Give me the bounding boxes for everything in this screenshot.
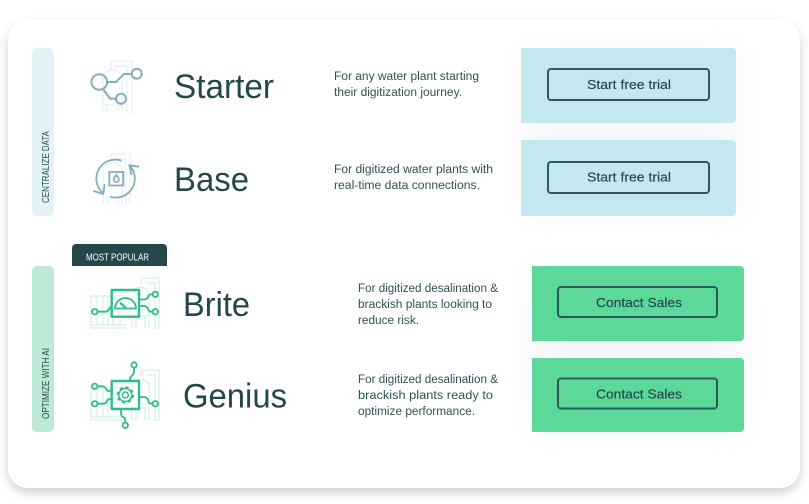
most popular badge xyxy=(72,244,167,266)
heading: Brite: Brite xyxy=(183,286,250,324)
text: genius description: brackish plants ready to xyxy=(358,390,493,402)
panel: starter call to action xyxy=(521,48,736,123)
most popular badge: MOST POPULAR xyxy=(86,252,149,264)
button: start free trial xyxy=(548,69,709,100)
icon: starter network xyxy=(92,61,142,112)
text: brite description: reduce risk. xyxy=(358,315,419,327)
button: contact sales xyxy=(558,287,717,317)
panel: brite call to action xyxy=(532,266,744,341)
panel: base call to action xyxy=(521,140,736,216)
panel: optimize with AI tab xyxy=(32,266,54,432)
button: start free trial xyxy=(548,162,709,193)
text: base description: For digitized water plants with xyxy=(334,164,493,176)
heading: Base: Base xyxy=(174,161,249,199)
panel: centralize data tab xyxy=(32,48,54,216)
panel: genius call to action xyxy=(532,358,744,432)
icon: genius gear xyxy=(91,362,159,428)
panel: optimize with AI tab: OPTIMIZE WITH AI xyxy=(40,348,52,419)
button: start free trial: Start free trial xyxy=(587,78,671,92)
button: contact sales: Contact Sales xyxy=(596,296,682,310)
text: brite description: brackish plants looking to xyxy=(358,299,492,311)
text: base description xyxy=(334,164,493,192)
text: genius description: optimize performance. xyxy=(358,406,475,418)
icon: base cycle with water drop xyxy=(93,154,139,204)
text: starter description xyxy=(334,71,479,99)
text: genius description: For digitized desalination & xyxy=(358,374,498,386)
panel: centralize data tab: CENTRALIZE DATA xyxy=(40,131,52,203)
text: brite description: For digitized desalination & xyxy=(358,283,498,295)
button: contact sales: Contact Sales xyxy=(596,388,682,402)
button: contact sales xyxy=(558,378,717,408)
text: brite description xyxy=(358,283,498,327)
heading: Starter: Starter xyxy=(174,68,274,106)
text: starter description: For any water plant starting xyxy=(334,71,479,83)
icon: brite gauge xyxy=(91,278,159,328)
heading: Genius: Genius xyxy=(183,378,287,416)
text: genius description xyxy=(358,374,498,418)
text: base description: real-time data connections. xyxy=(334,180,480,192)
button: start free trial: Start free trial xyxy=(587,170,671,184)
text: starter description: their digitization journey. xyxy=(334,87,462,99)
